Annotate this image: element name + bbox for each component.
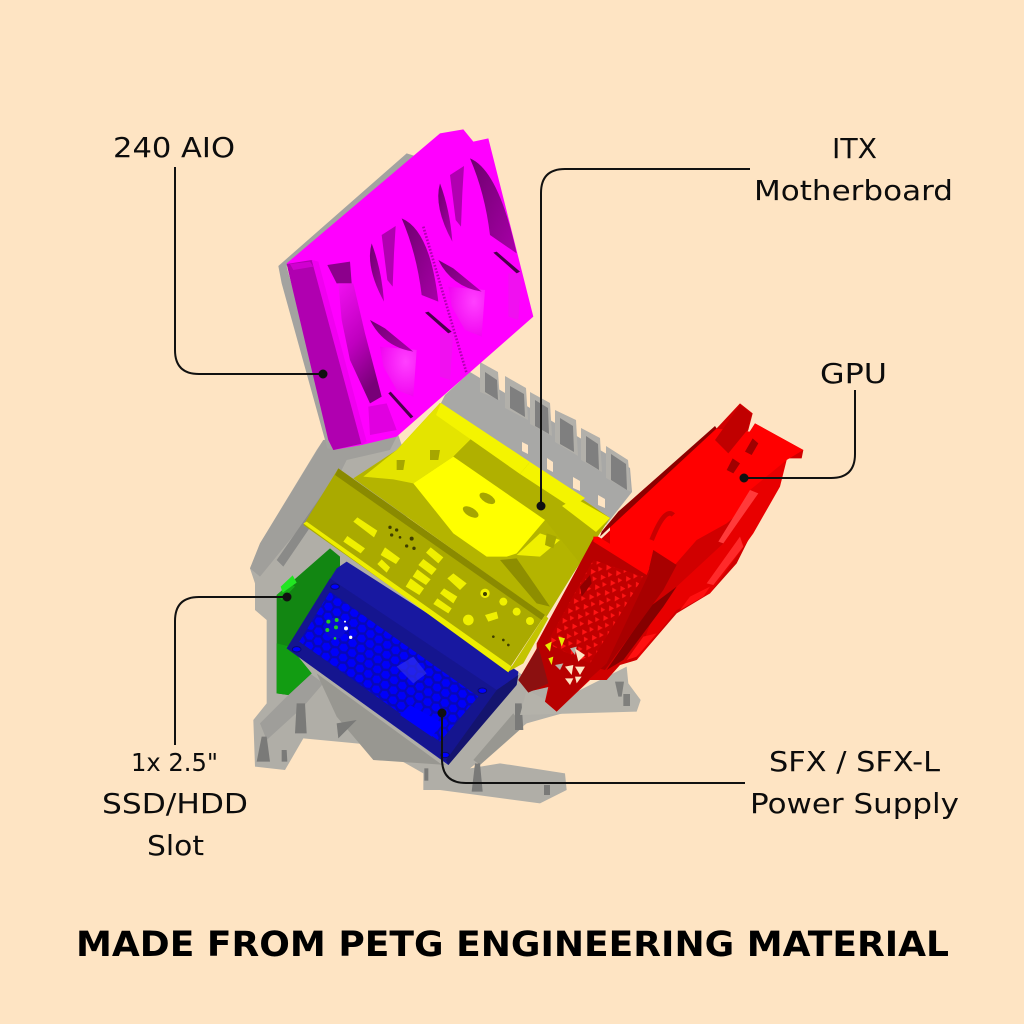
cast shadow [278, 153, 415, 450]
seam between fans [423, 227, 467, 373]
backing frame [250, 430, 580, 803]
top face [610, 423, 803, 572]
label: SFX power supply: Power Supply [750, 787, 959, 820]
label: GPU: GPU [820, 357, 887, 390]
fan frame notches [327, 262, 352, 283]
I/O bracket with vent mesh [518, 538, 650, 712]
label: ITX Motherboard [754, 132, 953, 207]
right foot [520, 667, 641, 715]
fan two blades [438, 158, 522, 337]
label: SSD/HDD slot [102, 748, 248, 862]
label: ITX Motherboard: Motherboard [754, 174, 953, 207]
title: MADE FROM PETG ENGINEERING MATERIAL [76, 925, 949, 965]
VRM heatsink fins [436, 403, 610, 532]
leader line: SSD/HDD [175, 594, 290, 745]
vent holes [545, 637, 565, 665]
leader line: 240 AIO [175, 167, 326, 378]
label: SFX power supply: SFX / SFX-L [769, 745, 940, 778]
component: 240 AIO radiator and fans (magenta) [278, 129, 533, 450]
shroud side [592, 550, 677, 670]
board top and heatsink [353, 403, 610, 617]
radiator side rim [287, 260, 363, 450]
fan shroud strips [637, 460, 787, 660]
fan one blades [370, 218, 453, 418]
component: GPU (red) [518, 403, 803, 712]
leader line: ITX motherboard [538, 169, 750, 510]
left side panels and feet [250, 430, 580, 803]
label: SSD/HDD slot: 1x 2.5" [131, 748, 218, 777]
radiator silhouette [287, 129, 533, 450]
component: ITX motherboard (yellow) [303, 403, 610, 672]
leader line: GPU [740, 390, 855, 482]
backplate shadow edge [600, 426, 717, 537]
component: SFX power supply (blue) [287, 562, 518, 765]
component: SSD/HDD slot (green) [277, 548, 340, 695]
label: SSD/HDD slot: SSD/HDD [102, 787, 248, 820]
I/O shield [303, 468, 548, 672]
label: SFX power supply [750, 745, 959, 820]
back comb plate [430, 362, 632, 525]
screws [257, 703, 550, 795]
case frame: translucent grey chassis [250, 362, 641, 803]
label: SSD/HDD slot: Slot [147, 829, 204, 862]
leader line: power supply [438, 710, 745, 783]
label: 240 AIO: 240 AIO [113, 131, 235, 164]
label: ITX Motherboard: ITX [832, 132, 877, 165]
GPU silhouette [518, 403, 803, 712]
